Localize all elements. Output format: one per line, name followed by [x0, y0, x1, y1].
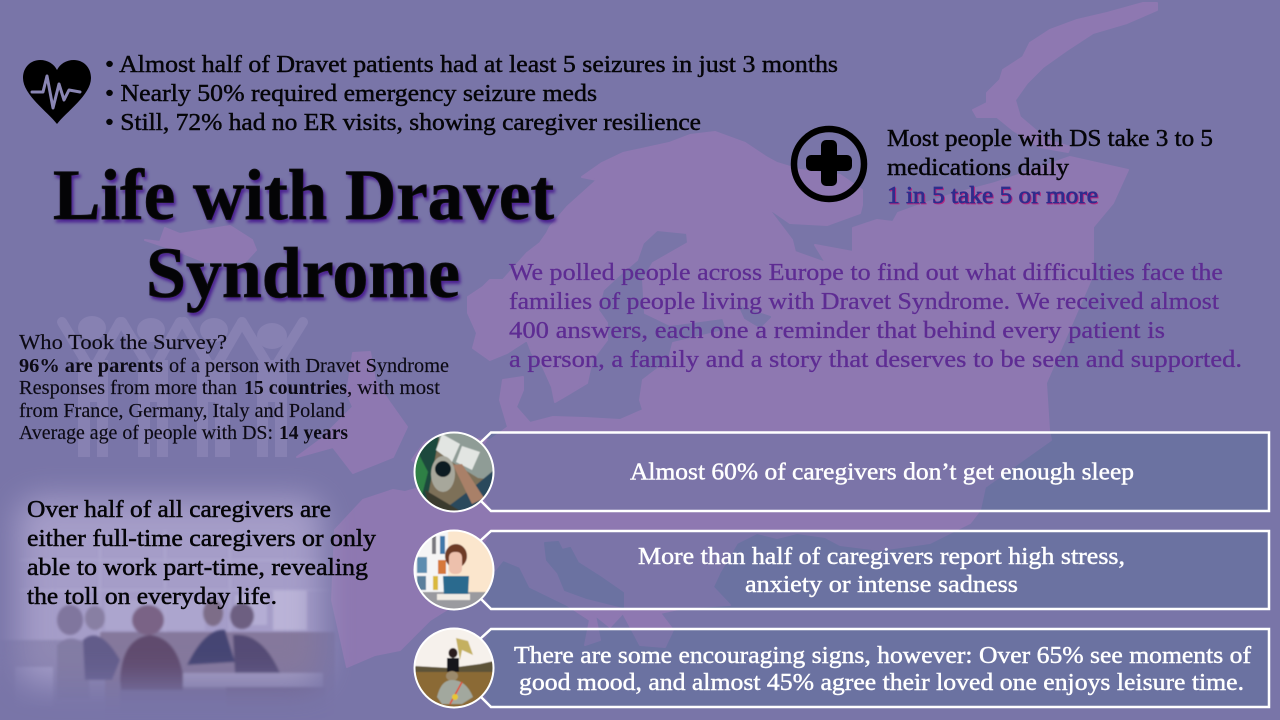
who took the survey: 96% are parents	[19, 356, 163, 377]
panel: encouraging signs: good mood, and almost 45% agree their loved one enjoys leisure time.	[519, 669, 1244, 696]
photo: child with kite	[414, 628, 494, 708]
photo: coffee and book	[414, 432, 494, 512]
medications text: 1 in 5 take 5 or more	[887, 183, 1098, 209]
seizure facts list: • Still, 72% had no ER visits, showing caregiver resilience	[105, 110, 701, 136]
who took the survey: Average age of people with DS:	[19, 423, 273, 444]
medical cross icon	[794, 129, 864, 199]
photo frame	[414, 628, 494, 708]
photo frame	[414, 530, 494, 610]
who took the survey: Responses from more than	[19, 378, 237, 399]
encouraging signs text: There are some encouraging signs, however: Over 65% see moments of	[514, 642, 1252, 669]
intro paragraph: a person, a family and a story that deserves to be seen and supported.	[509, 346, 1242, 373]
caregivers work statement: the toll on everyday life.	[27, 583, 277, 610]
sleep text: Almost 60% of caregivers don’t get enough sleep	[630, 458, 1134, 486]
panel: sleep	[414, 432, 1269, 512]
background map of Europe	[145, 3, 1157, 667]
faded meeting photo	[5, 485, 334, 696]
who took the survey: of a person with Dravet Syndrome	[169, 356, 449, 377]
title: Life with Dravet	[53, 155, 554, 235]
intro paragraph: 400 answers, each one a reminder that behind every patient is	[509, 317, 1165, 344]
intro paragraph: We polled people across Europe to find out what difficulties face the	[509, 259, 1223, 286]
who took the survey: 15 countries	[244, 378, 347, 399]
seizure facts list: • Nearly 50% required emergency seizure meds	[105, 81, 597, 107]
who took the survey: 14 years	[279, 423, 348, 444]
medications text: medications daily	[887, 155, 1069, 181]
people silhouettes watermark	[62, 316, 303, 457]
photo frame	[414, 432, 494, 512]
who took the survey: , with most	[347, 378, 441, 399]
who took the survey	[19, 330, 449, 444]
caregivers work statement: Over half of all caregivers are	[27, 496, 331, 523]
photo: distressed woman	[414, 530, 494, 610]
medications text: Most people with DS take 3 to 5	[887, 126, 1213, 152]
intro paragraph	[509, 259, 1242, 373]
who took the survey: from France, Germany, Italy and Poland	[19, 401, 345, 422]
who took the survey: Who Took the Survey?	[19, 330, 227, 354]
medications text	[887, 126, 1213, 209]
panel: stress	[414, 530, 1269, 610]
title	[53, 155, 554, 313]
seizure facts list	[105, 52, 838, 136]
intro paragraph: families of people living with Dravet Syndrome. We received almost	[509, 288, 1219, 315]
caregivers work statement: able to work part-time, revealing	[27, 554, 368, 581]
panel: encouraging signs	[414, 628, 1269, 708]
caregivers work statement: either full-time caregivers or only	[27, 525, 377, 552]
panel: stress: anxiety or intense sadness	[745, 571, 1018, 598]
heart rate icon	[23, 60, 91, 124]
title: Syndrome	[146, 233, 460, 313]
caregivers work statement	[27, 496, 377, 610]
stress text: More than half of caregivers report high stress,	[638, 543, 1125, 570]
seizure facts list: • Almost half of Dravet patients had at least 5 seizures in just 3 months	[105, 52, 838, 78]
